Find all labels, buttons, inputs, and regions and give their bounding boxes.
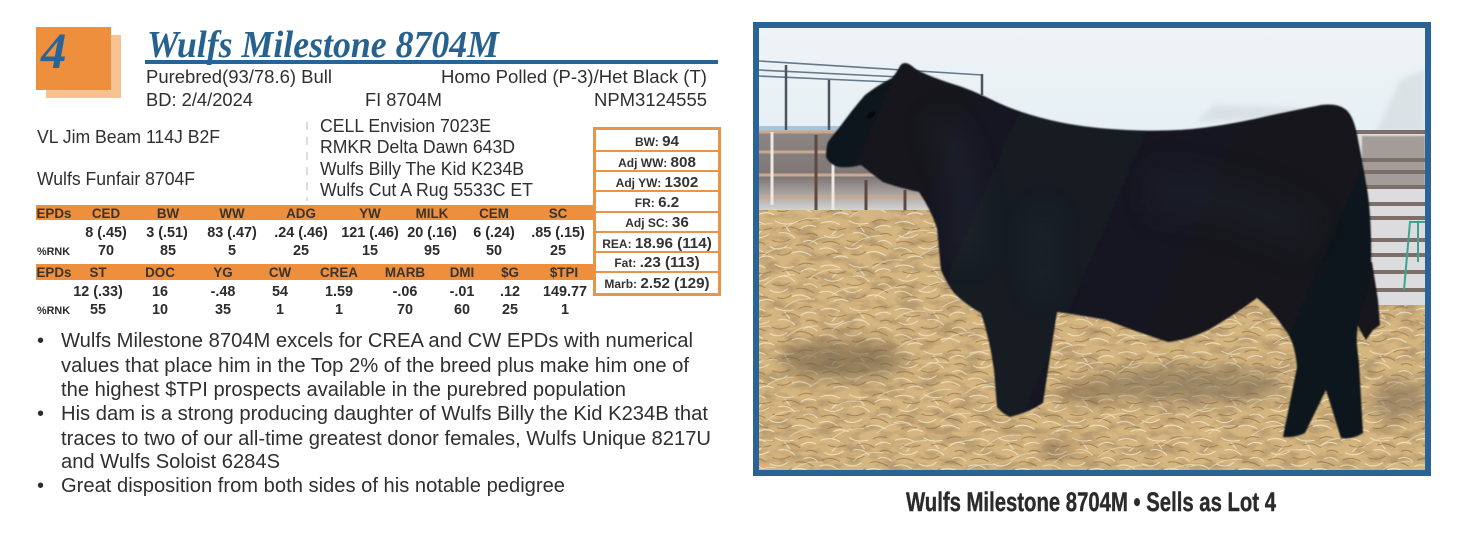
EPD table: top: 25 [293, 243, 309, 259]
bullet list: His dam is a strong producing daughter of Wulfs Billy the Kid K234B that [61, 403, 708, 425]
distant trees [1200, 72, 1424, 130]
registration details: BD: 2/4/2024 [146, 89, 253, 110]
registration details: Purebred(93/78.6) Bull [146, 66, 332, 87]
EPD table: bottom: MARB [385, 265, 425, 280]
registration details: NPM3124555 [594, 89, 707, 110]
EPD table: bottom: 10 [152, 302, 168, 318]
EPD table: bottom: 16 [152, 284, 168, 300]
pedigree: Wulfs Billy The Kid K234B [320, 158, 524, 179]
bullet list: • [37, 403, 44, 425]
EPD table: bottom: 60 [454, 302, 470, 318]
bullet list [37, 330, 711, 497]
EPD table: top: ADG [286, 206, 316, 221]
EPD table: top: YW [359, 206, 381, 221]
EPD table: bottom: 54 [272, 284, 288, 300]
EPD table: bottom: 25 [502, 302, 518, 318]
EPD table: bottom: .12 [500, 284, 520, 300]
EPD table: top: 50 [486, 243, 502, 259]
EPD table: top: 121 (.46) [341, 225, 399, 241]
EPD table: top: 85 [160, 243, 176, 259]
bullet list: and Wulfs Soloist 6284S [61, 451, 280, 473]
EPD table: top: 83 (.47) [207, 225, 257, 241]
photo frame [756, 25, 1428, 473]
EPD table: top: 20 (.16) [407, 225, 457, 241]
performance data box: BW: 94 [635, 133, 680, 150]
registration details [146, 66, 707, 110]
bullet list: traces to two of our all-time greatest donor females, Wulfs Unique 8217U [61, 428, 711, 450]
pedigree: CELL Envision 7023E [320, 115, 491, 136]
EPD table: top: 5 [228, 243, 236, 259]
EPD table: bottom: -.06 [393, 284, 417, 300]
EPD table: bottom: $TPI [550, 265, 578, 280]
EPD table: bottom: EPDs [37, 265, 71, 280]
performance data box: FR: 6.2 [635, 194, 679, 211]
EPD table: bottom: 1 [561, 302, 569, 318]
performance data box: Fat: .23 (113) [614, 254, 700, 271]
EPD table: bottom: 35 [215, 302, 231, 318]
bull [826, 63, 1380, 438]
EPD table: top: BW [157, 206, 180, 221]
EPD table: bottom: CW [269, 265, 292, 280]
EPD table: bottom: 1.59 [325, 284, 353, 300]
EPD table: bottom: $G [501, 265, 519, 280]
performance data box: Marb: 2.52 (129) [604, 275, 710, 292]
EPD table: top: MILK [416, 206, 449, 221]
bullet list: • [37, 475, 44, 497]
EPD table: bottom: ST [89, 265, 107, 280]
EPD table: bottom: 55 [90, 302, 106, 318]
performance data box: Adj SC: 36 [625, 214, 689, 231]
EPD table: bottom: DMI [450, 265, 474, 280]
performance data box: REA: 18.96 (114) [602, 235, 712, 252]
EPD table: top: .85 (.15) [531, 225, 585, 241]
bullet list: Great disposition from both sides of his notable pedigree [61, 475, 565, 497]
EPD table: bottom: 149.77 [543, 284, 587, 300]
bullet list: the highest $TPI prospects available in the purebred population [61, 379, 626, 401]
EPD table: top: %RNK [37, 246, 70, 258]
EPD table: top: 95 [424, 243, 440, 259]
EPD table: top: 6 (.24) [473, 225, 515, 241]
left background fence [759, 60, 984, 210]
pedigree [37, 115, 533, 201]
pedigree: RMKR Delta Dawn 643D [320, 136, 515, 157]
performance data box: Adj YW: 1302 [616, 174, 698, 191]
EPD table: top: .24 (.46) [274, 225, 328, 241]
EPD table: bottom: YG [213, 265, 233, 280]
EPD table: top: WW [219, 206, 245, 221]
straw ground [759, 205, 1430, 470]
right background fence [1355, 130, 1425, 310]
pedigree: Wulfs Funfair 8704F [37, 168, 195, 189]
EPD table: bottom [36, 264, 594, 318]
title [145, 24, 718, 66]
EPD table: bottom: DOC [145, 265, 175, 280]
EPD table: top [36, 205, 594, 259]
EPD table: top: SC [549, 206, 568, 221]
performance data box: Adj WW: 808 [618, 154, 696, 171]
EPD table: bottom: 1 [335, 302, 343, 318]
title: Wulfs Milestone 8704M [147, 24, 500, 66]
bullet list: Wulfs Milestone 8704M excels for CREA and CW EPDs with numerical [61, 330, 693, 352]
EPD table: bottom: -.48 [211, 284, 235, 300]
EPD table: top: 8 (.45) [85, 225, 127, 241]
EPD table: top: CEM [479, 206, 509, 221]
pedigree: Wulfs Cut A Rug 5533C ET [320, 179, 533, 200]
pedigree: VL Jim Beam 114J B2F [37, 126, 220, 147]
EPD table: top: 25 [550, 243, 566, 259]
EPD table: top: CED [92, 206, 120, 221]
photo caption: Wulfs Milestone 8704M • Sells as Lot 4 [906, 487, 1276, 517]
EPD table: bottom: -.01 [450, 284, 474, 300]
performance data box [594, 128, 720, 294]
EPD table: top: 70 [98, 243, 114, 259]
registration details: FI 8704M [365, 89, 442, 110]
registration details: Homo Polled (P-3)/Het Black (T) [441, 66, 707, 87]
bullet list: • [37, 330, 44, 352]
EPD table: bottom: 1 [276, 302, 284, 318]
bullet list: values that place him in the Top 2% of the breed plus make him one of [61, 355, 689, 377]
EPD table: bottom: %RNK [37, 305, 70, 317]
lot number badge: 4 [40, 24, 66, 80]
photo: black bull standing on straw [756, 25, 1430, 473]
EPD table: bottom: 12 (.33) [73, 284, 123, 300]
lot number badge [36, 24, 121, 98]
EPD table: top: 3 (.51) [146, 225, 188, 241]
EPD table: bottom: CREA [320, 265, 358, 280]
EPD table: top: 15 [362, 243, 378, 259]
EPD table: top: EPDs [37, 206, 71, 221]
EPD table: bottom: 70 [397, 302, 413, 318]
